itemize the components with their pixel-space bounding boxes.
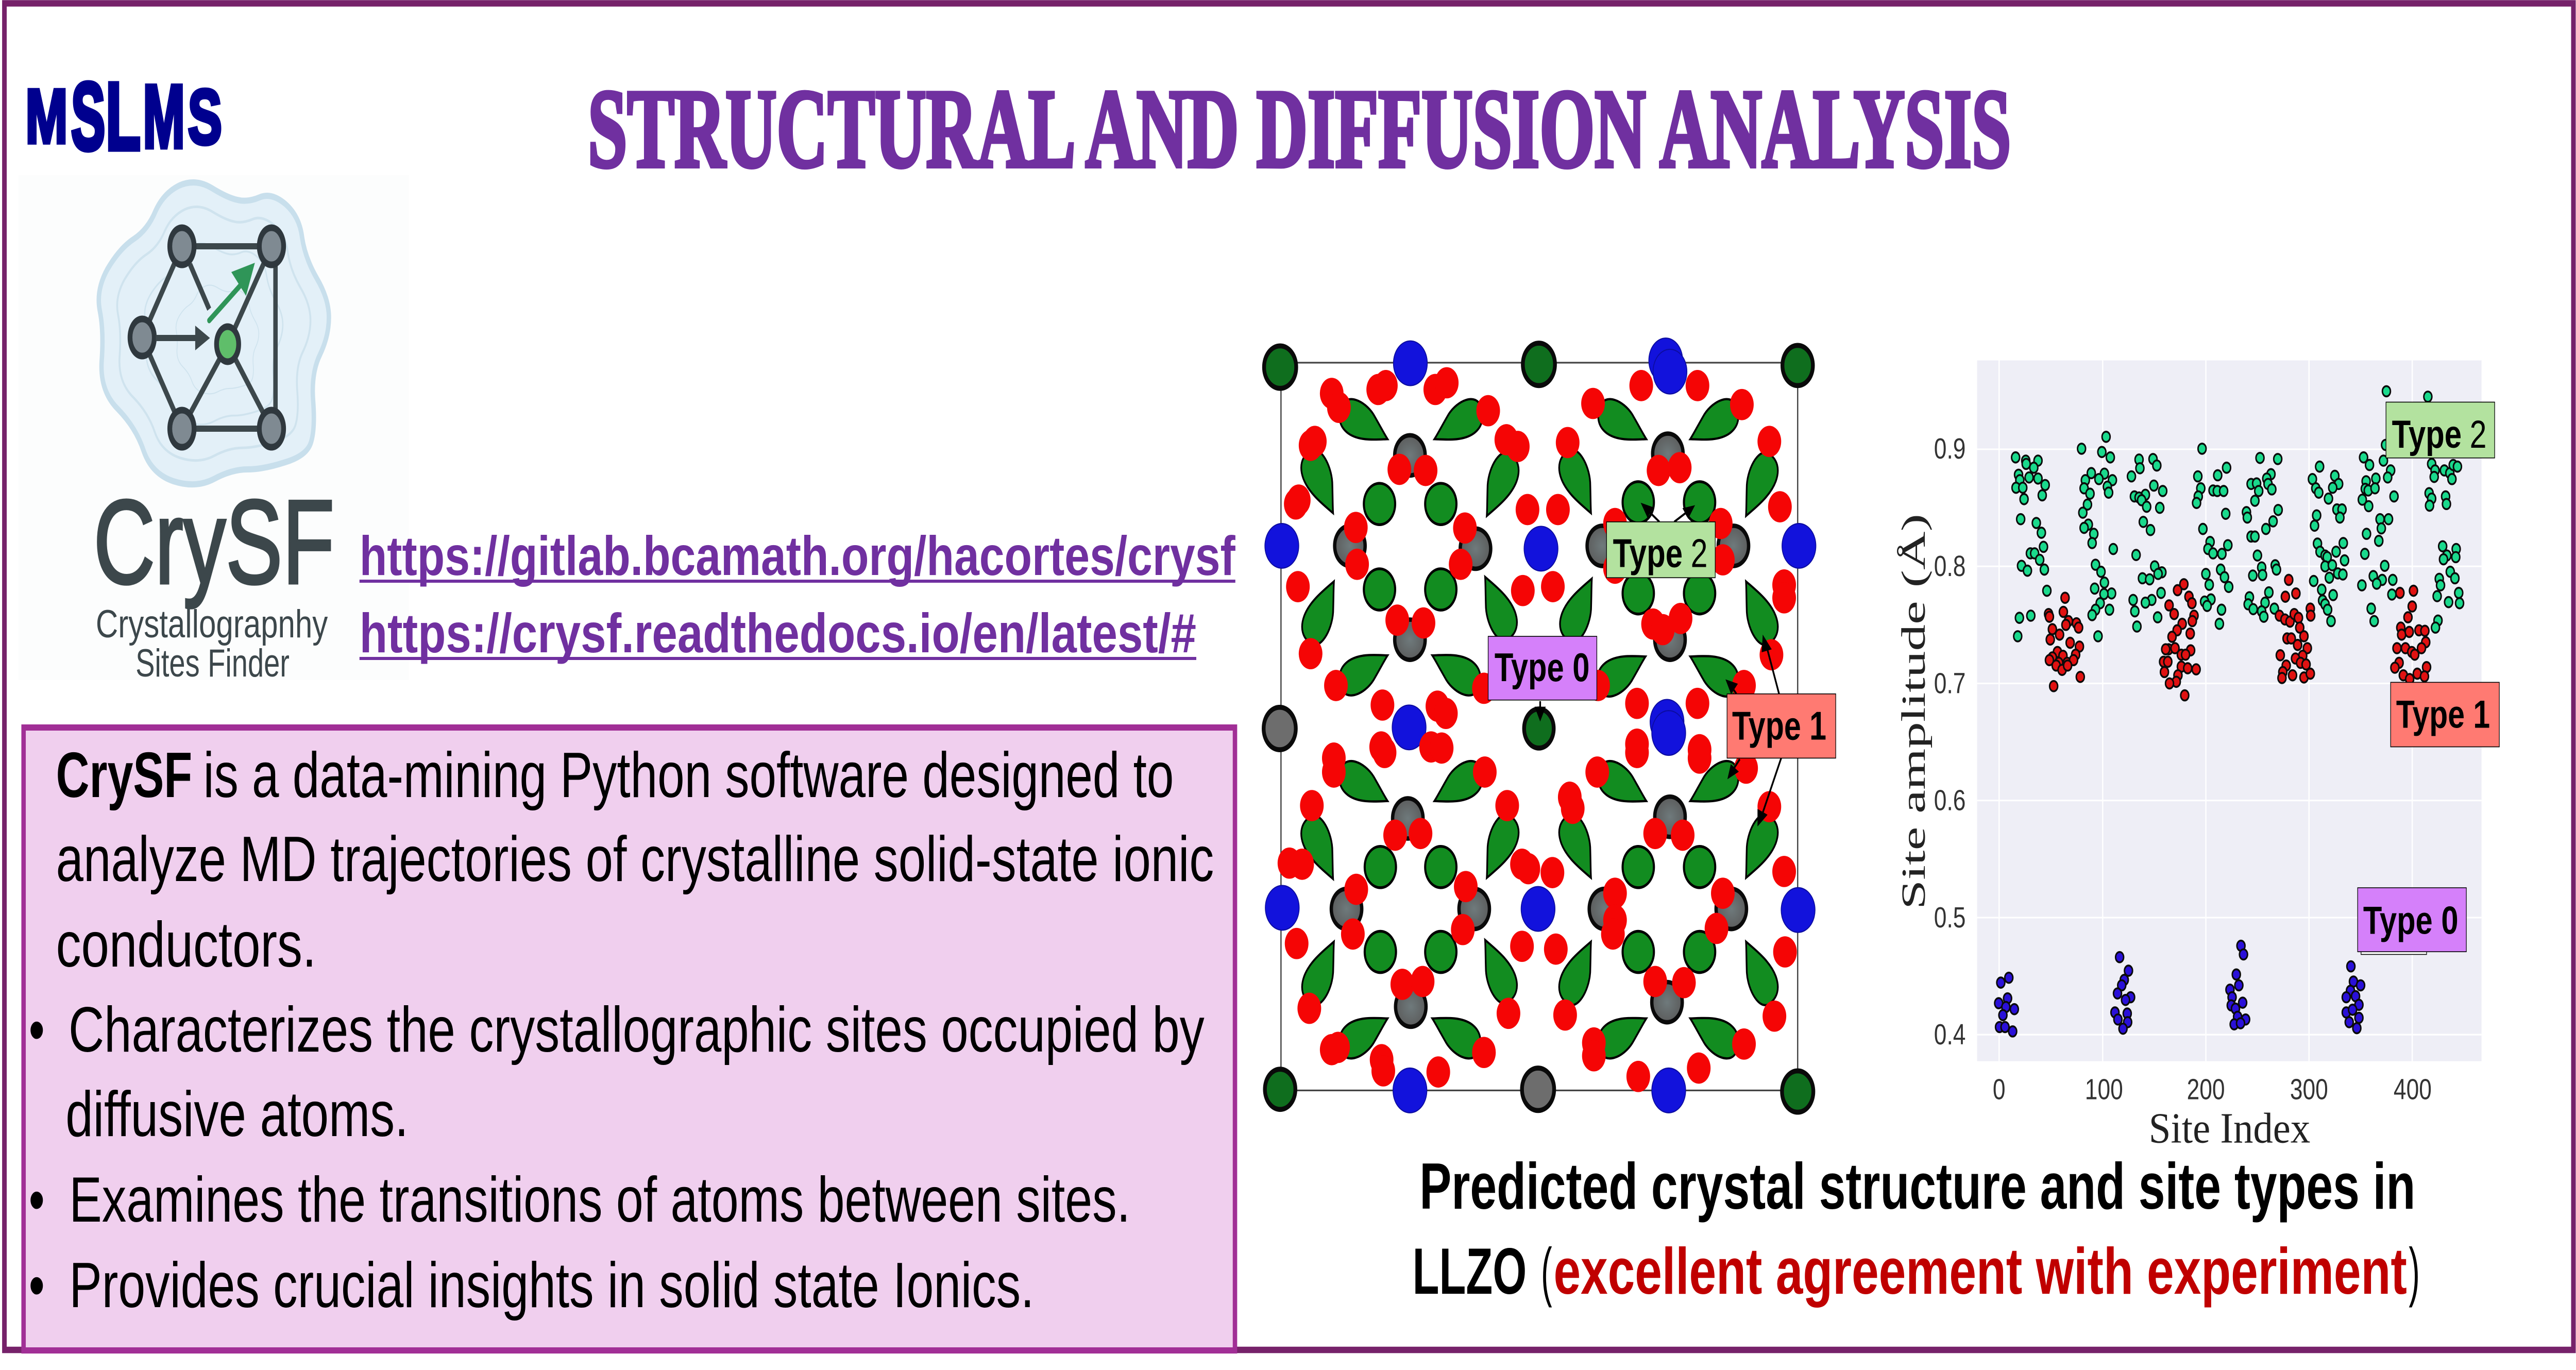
label arrows <box>1536 504 1781 824</box>
x-axis tick labels: 100 <box>2085 1073 2123 1106</box>
blue atoms <box>1265 338 1816 1113</box>
caption line 2: ) <box>2409 1235 2420 1308</box>
y-axis tick labels <box>1934 432 1965 1051</box>
y-axis tick labels: 0.8 <box>1934 550 1965 582</box>
logo background <box>19 175 409 680</box>
MSLMS wordmark: M <box>143 66 185 166</box>
y-axis tick labels: 0.9 <box>1934 432 1965 465</box>
link: readthedocs: https://crysf.readthedocs.io/en/latest/# <box>360 602 1196 664</box>
corner and edge atoms <box>1264 343 1814 1112</box>
panel: description <box>24 728 1235 1350</box>
bullet: characterizes: diffusive atoms. <box>65 1078 409 1149</box>
green ellipsoid sites <box>1296 393 1783 1064</box>
x-axis tick labels: 0 <box>1993 1073 2006 1106</box>
bullet: provides: • <box>29 1249 45 1321</box>
caption line 2: LLZO <box>1413 1235 1527 1308</box>
label: type 2: Type <box>2392 413 2462 456</box>
x-axis tick labels: 300 <box>2290 1073 2328 1106</box>
label: type 2: 2 <box>1691 531 1707 576</box>
icon: green arrow <box>209 263 255 320</box>
y-axis title: Site amplitude (Å) <box>1895 514 1933 909</box>
label: type 0: Type 0 <box>1495 645 1589 690</box>
bullet: examines: • <box>29 1163 45 1235</box>
scatter chart: site amplitude vs site index <box>1895 360 2499 1152</box>
x-axis tick labels <box>1993 1073 2432 1106</box>
logo name: CrySF <box>94 475 334 608</box>
icon: dark arrow <box>156 326 210 350</box>
MSLMS wordmark: M <box>25 74 68 159</box>
points: type 2 <box>2011 386 2464 641</box>
intro paragraph: conductors. <box>56 908 316 980</box>
caption line 1: Predicted crystal structure and site types in <box>1419 1150 2415 1223</box>
x-axis tick labels: 200 <box>2187 1073 2225 1106</box>
icon: lattice nodes <box>130 228 283 447</box>
bullet: examines: Examines the transitions of atoms between sites. <box>69 1163 1130 1235</box>
title: STRUCTURAL AND DIFFUSION ANALYSIS <box>588 66 2011 191</box>
label: type 1: Type 1 <box>1732 703 1826 749</box>
plot background <box>1977 360 2482 1061</box>
icon: density blob <box>99 182 329 484</box>
red atoms <box>1278 367 1797 1092</box>
y-axis tick labels: 0.4 <box>1934 1018 1965 1051</box>
y-axis tick labels: 0.5 <box>1934 901 1965 934</box>
x-axis title: Site Index <box>2149 1105 2310 1152</box>
label: type 1: Type 1 <box>2396 694 2490 736</box>
label: type 0 <box>1488 636 1597 700</box>
y-axis tick labels: 0.7 <box>1934 667 1965 700</box>
y-axis tick labels: 0.6 <box>1934 784 1965 817</box>
bullet: characterizes: • <box>29 993 45 1065</box>
label: type 2: 2 <box>2470 413 2487 456</box>
MSLMS wordmark: L <box>106 63 141 170</box>
crystal structure figure <box>1264 338 1836 1113</box>
intro paragraph <box>56 739 1214 980</box>
links <box>360 525 1235 664</box>
link: gitlab: https://gitlab.bcamath.org/hacortes/crysf <box>360 525 1235 587</box>
intro paragraph: is a data-mining Python software designed to <box>204 739 1174 810</box>
caption line 2: ( <box>1541 1235 1552 1308</box>
label: type 2 <box>1606 522 1715 578</box>
logo subtitle line 2: Sites Finder <box>135 641 290 685</box>
caption line 2: excellent agreement with experiment <box>1553 1235 2407 1308</box>
CrySF logo <box>19 175 409 685</box>
bullet: characterizes: Characterizes the crystallographic sites occupied by <box>69 993 1205 1065</box>
label: type 0: Type 0 <box>2363 900 2459 942</box>
points: type 1 <box>2044 575 2431 701</box>
label: type 1 <box>1727 694 1836 758</box>
green round sites <box>1364 482 1715 973</box>
bullet: provides: Provides crucial insights in solid state Ionics. <box>69 1249 1034 1321</box>
label: type 0 <box>2358 888 2466 954</box>
x-axis tick labels: 400 <box>2394 1073 2432 1106</box>
unit cell frame <box>1281 363 1798 1090</box>
logo subtitle line 1: Crystallograpnhy <box>96 602 328 646</box>
figure caption <box>1413 1150 2420 1308</box>
MSLMS wordmark: S <box>188 74 222 161</box>
points: type 0 <box>1995 941 2365 1037</box>
intro paragraph: analyze MD trajectories of crystalline solid-state ionic <box>56 823 1214 894</box>
MSLMS wordmark <box>25 63 222 170</box>
gray atoms <box>1331 434 1749 1027</box>
MSLMS wordmark: S <box>71 63 105 170</box>
label: type 2 <box>2386 402 2495 458</box>
bullet: characterizes <box>29 993 1205 1149</box>
label: type 1 <box>2391 682 2499 747</box>
intro paragraph: CrySF <box>56 739 192 810</box>
icon: lattice bonds <box>142 246 276 429</box>
label: type 2: Type <box>1613 531 1683 576</box>
